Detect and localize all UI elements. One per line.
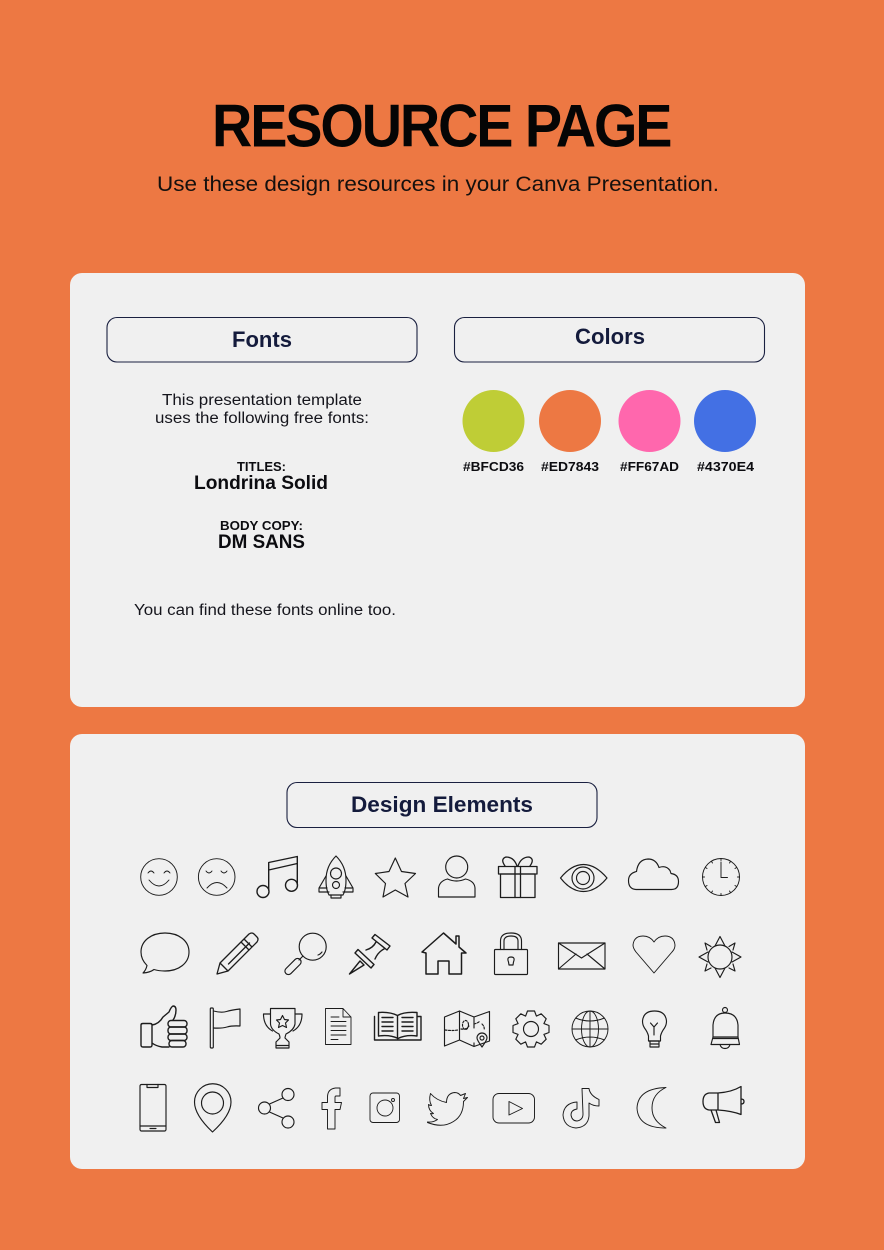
icon: star xyxy=(375,858,416,897)
icon: cloud xyxy=(628,859,678,890)
icon: flag xyxy=(210,1008,240,1048)
icon: person xyxy=(438,856,475,897)
text block: body copy font: DM SANS xyxy=(218,532,305,553)
panel: design elements xyxy=(70,734,805,1169)
icon: facebook xyxy=(322,1088,342,1129)
icon: eye xyxy=(560,864,607,892)
icon: gear xyxy=(513,1011,549,1047)
heading: fonts: Fonts xyxy=(232,327,292,352)
icon: light bulb xyxy=(642,1011,666,1047)
icon: megaphone xyxy=(703,1086,744,1122)
icon: bell xyxy=(711,1008,740,1048)
text block: titles font: TITLES: xyxy=(237,460,286,474)
color swatch: pink: #FF67AD xyxy=(620,460,679,474)
color swatch: green: #BFCD36 xyxy=(463,460,524,474)
icon: share xyxy=(258,1088,294,1128)
text block: font intro: This presentation template xyxy=(162,392,362,409)
icon: house xyxy=(422,933,466,974)
icon: gift xyxy=(498,857,537,898)
icon: pencil xyxy=(217,933,258,974)
icon: globe xyxy=(572,1011,608,1047)
text block: titles font xyxy=(194,460,328,494)
subtitle: Use these design resources in your Canva Presentation. xyxy=(157,173,719,196)
icon: frown xyxy=(198,859,235,895)
color swatch: orange xyxy=(539,390,601,474)
icon: heart xyxy=(633,936,675,973)
heading: fonts xyxy=(107,318,417,362)
title: RESOURCE PAGE xyxy=(212,94,671,160)
icon: trophy xyxy=(264,1008,302,1048)
color swatch: green xyxy=(462,390,524,474)
icon: rocket xyxy=(319,856,353,898)
heading: design elements: Design Elements xyxy=(351,792,533,817)
color swatch: blue: #4370E4 xyxy=(697,460,754,474)
text block: fonts note: You can find these fonts online too. xyxy=(134,602,396,619)
icon: sun xyxy=(699,936,741,978)
icon: thumbs up xyxy=(141,1006,187,1047)
icon: youtube xyxy=(493,1094,534,1123)
icon: clock xyxy=(702,858,740,896)
text block: font intro: uses the following free fonts: xyxy=(155,410,369,427)
icon: pushpin xyxy=(350,934,390,974)
text block: body copy font xyxy=(218,519,305,553)
icon: location pin xyxy=(194,1084,231,1132)
text block: titles font: Londrina Solid xyxy=(194,473,328,494)
icon: magnifier xyxy=(283,933,326,976)
icon: lock xyxy=(494,933,528,974)
icon: speech bubble xyxy=(141,933,189,973)
icon: music note xyxy=(257,856,298,898)
icon: tiktok xyxy=(563,1088,599,1128)
color swatch: blue xyxy=(694,390,756,474)
color swatch: orange: #ED7843 xyxy=(541,460,599,474)
icon: moon xyxy=(637,1088,666,1128)
heading: design elements xyxy=(287,782,597,828)
icon: instagram xyxy=(370,1093,400,1122)
color swatch: pink xyxy=(618,390,680,474)
icon: map xyxy=(444,1011,490,1047)
icon: smartphone xyxy=(140,1084,166,1131)
icon: smile xyxy=(141,859,177,895)
panel: fonts and colors xyxy=(70,273,805,707)
icon: twitter xyxy=(428,1092,468,1125)
icon: document xyxy=(326,1008,351,1044)
heading: colors: Colors xyxy=(575,324,645,349)
icon: envelope xyxy=(558,943,605,969)
heading: colors xyxy=(454,318,764,362)
text block: body copy font: BODY COPY: xyxy=(220,519,303,533)
icon: open book xyxy=(374,1012,421,1040)
text block: font intro xyxy=(155,392,369,427)
